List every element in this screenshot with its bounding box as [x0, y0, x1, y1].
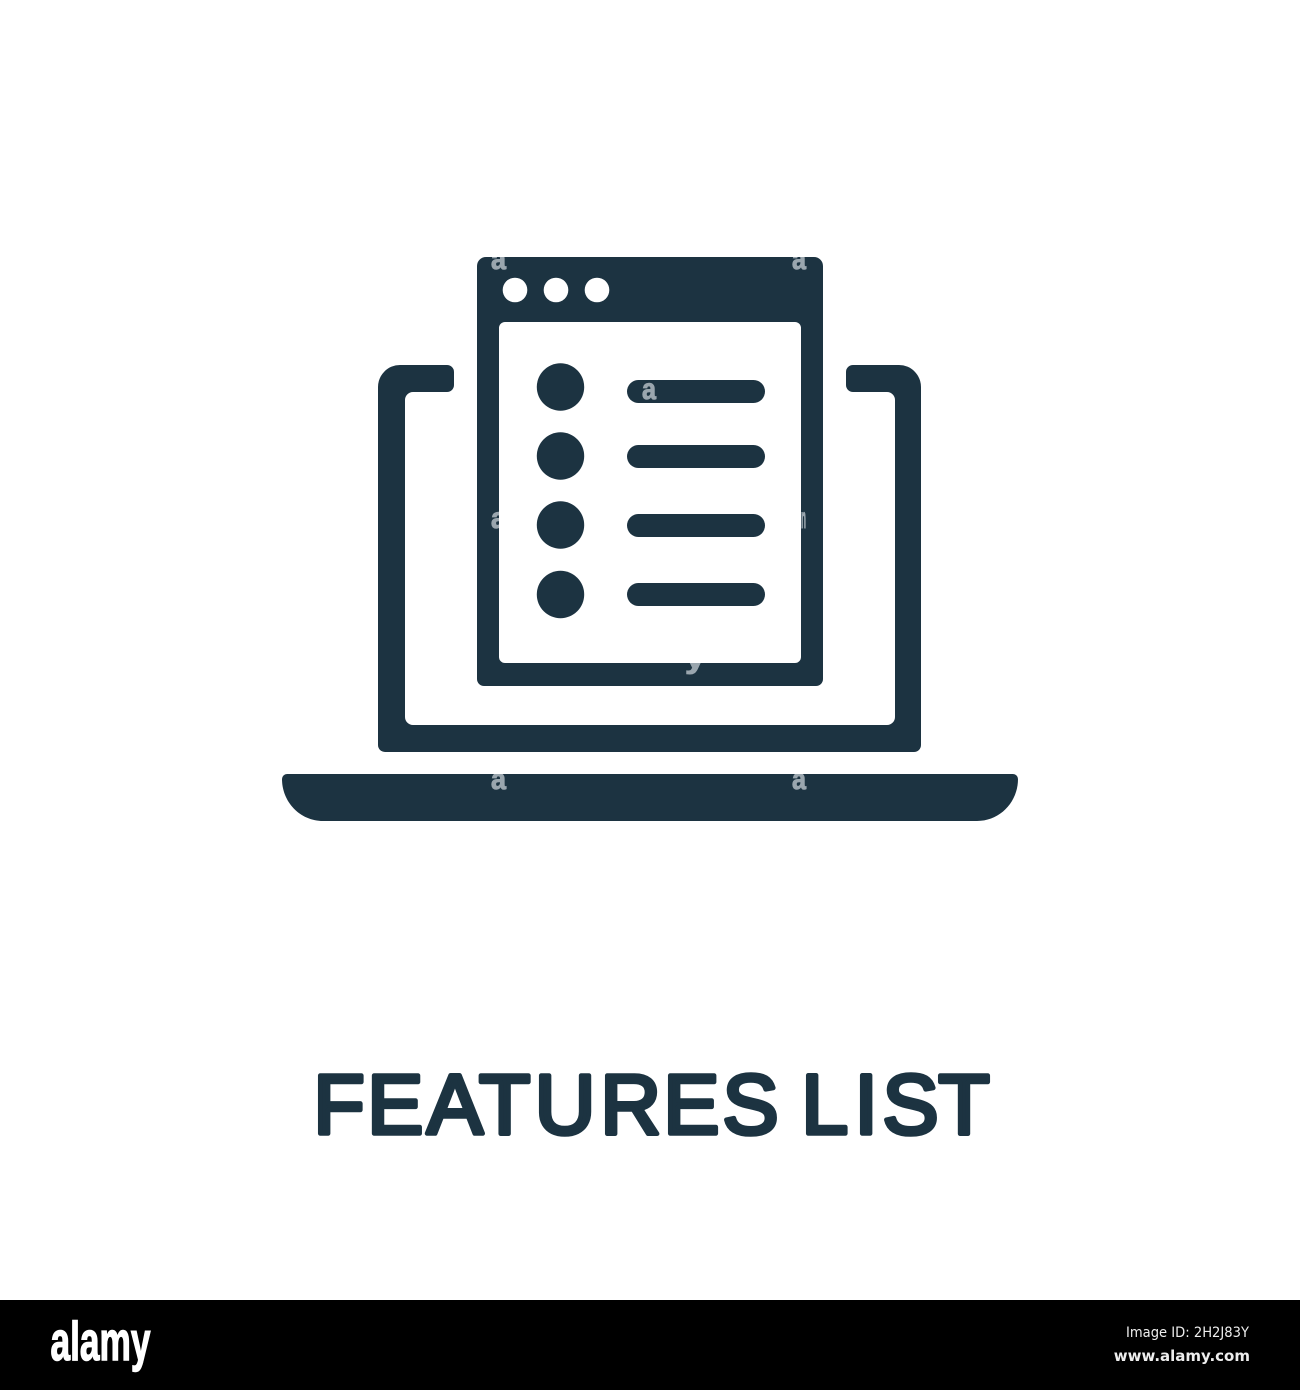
website: www.alamy.com	[1114, 1347, 1250, 1365]
icon: laptop screen outline	[378, 365, 921, 752]
watermark fragments: y	[685, 642, 705, 675]
list row 3	[537, 501, 765, 549]
title: FEATURES LIST	[313, 1058, 990, 1152]
list row 2	[537, 432, 765, 480]
window control dots	[503, 278, 609, 302]
watermark fragments: a	[642, 373, 656, 406]
window frame	[477, 257, 823, 686]
watermark fragments: a	[792, 763, 806, 796]
list row 4	[537, 571, 765, 618]
list row 1	[537, 363, 765, 411]
icon: laptop with features list window	[282, 243, 1018, 821]
alamy logo: alamy	[50, 1310, 151, 1372]
icon: browser window	[477, 257, 823, 686]
watermark fragments: a	[491, 763, 506, 796]
watermark fragments: a	[491, 502, 506, 535]
watermark fragments: a	[792, 243, 806, 276]
watermark fragments	[491, 243, 806, 796]
footer band	[0, 1300, 1300, 1390]
icon: laptop with features list window: n	[801, 502, 806, 535]
image id: Image ID: 2H2J83Y	[1126, 1325, 1249, 1341]
watermark fragments: a	[491, 243, 506, 276]
icon: laptop base	[282, 774, 1018, 821]
